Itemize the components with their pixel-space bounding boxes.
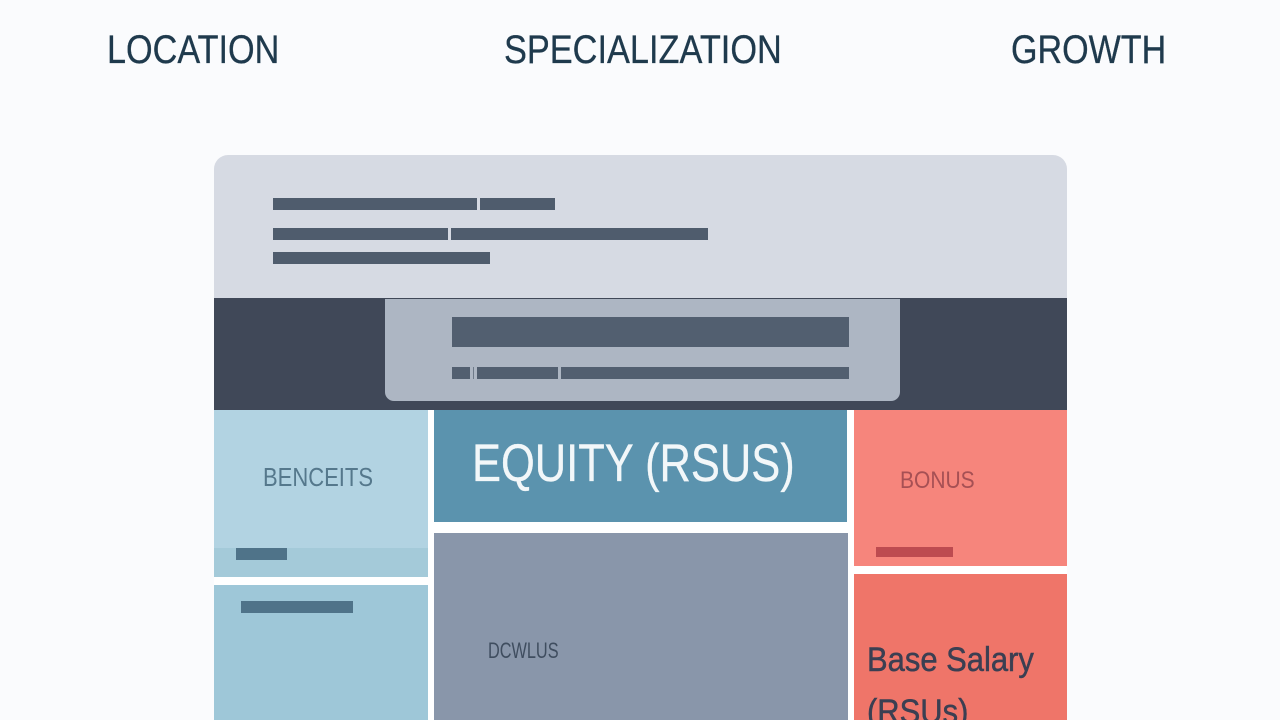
panel: lower left bbox=[214, 585, 428, 720]
label: benefits: BENCEITS bbox=[263, 462, 373, 492]
label: base salary: Base Salary bbox=[867, 641, 1034, 679]
inset text lines bbox=[452, 367, 849, 379]
panel: equity bbox=[434, 410, 847, 522]
panel: center lower bbox=[434, 533, 848, 720]
label: bonus: BONUS bbox=[900, 467, 975, 494]
benefits bar bbox=[236, 548, 287, 560]
lower left bar bbox=[241, 601, 353, 613]
panel: base salary bbox=[854, 574, 1067, 720]
panel: central inset bbox=[385, 299, 900, 401]
heading: location: LOCATION bbox=[107, 28, 279, 72]
bonus bar bbox=[876, 547, 953, 557]
panel: benefits bbox=[214, 410, 428, 577]
panel: compensation card bbox=[214, 155, 1067, 720]
label: bonus placeholder: DCWLUS bbox=[488, 638, 559, 663]
panel: dark band bbox=[214, 298, 1067, 410]
panel: top header band bbox=[214, 155, 1067, 298]
inset title bar bbox=[452, 317, 849, 347]
heading: growth: GROWTH bbox=[1011, 28, 1166, 72]
label: equity: EQUITY (RSUS) bbox=[472, 434, 795, 493]
text placeholder lines bbox=[273, 198, 708, 264]
heading: specialization: SPECIALIZATION bbox=[504, 28, 782, 72]
label: base salary bbox=[867, 641, 1034, 720]
benefits lower strip bbox=[214, 548, 428, 577]
panel: bonus bbox=[854, 410, 1067, 566]
